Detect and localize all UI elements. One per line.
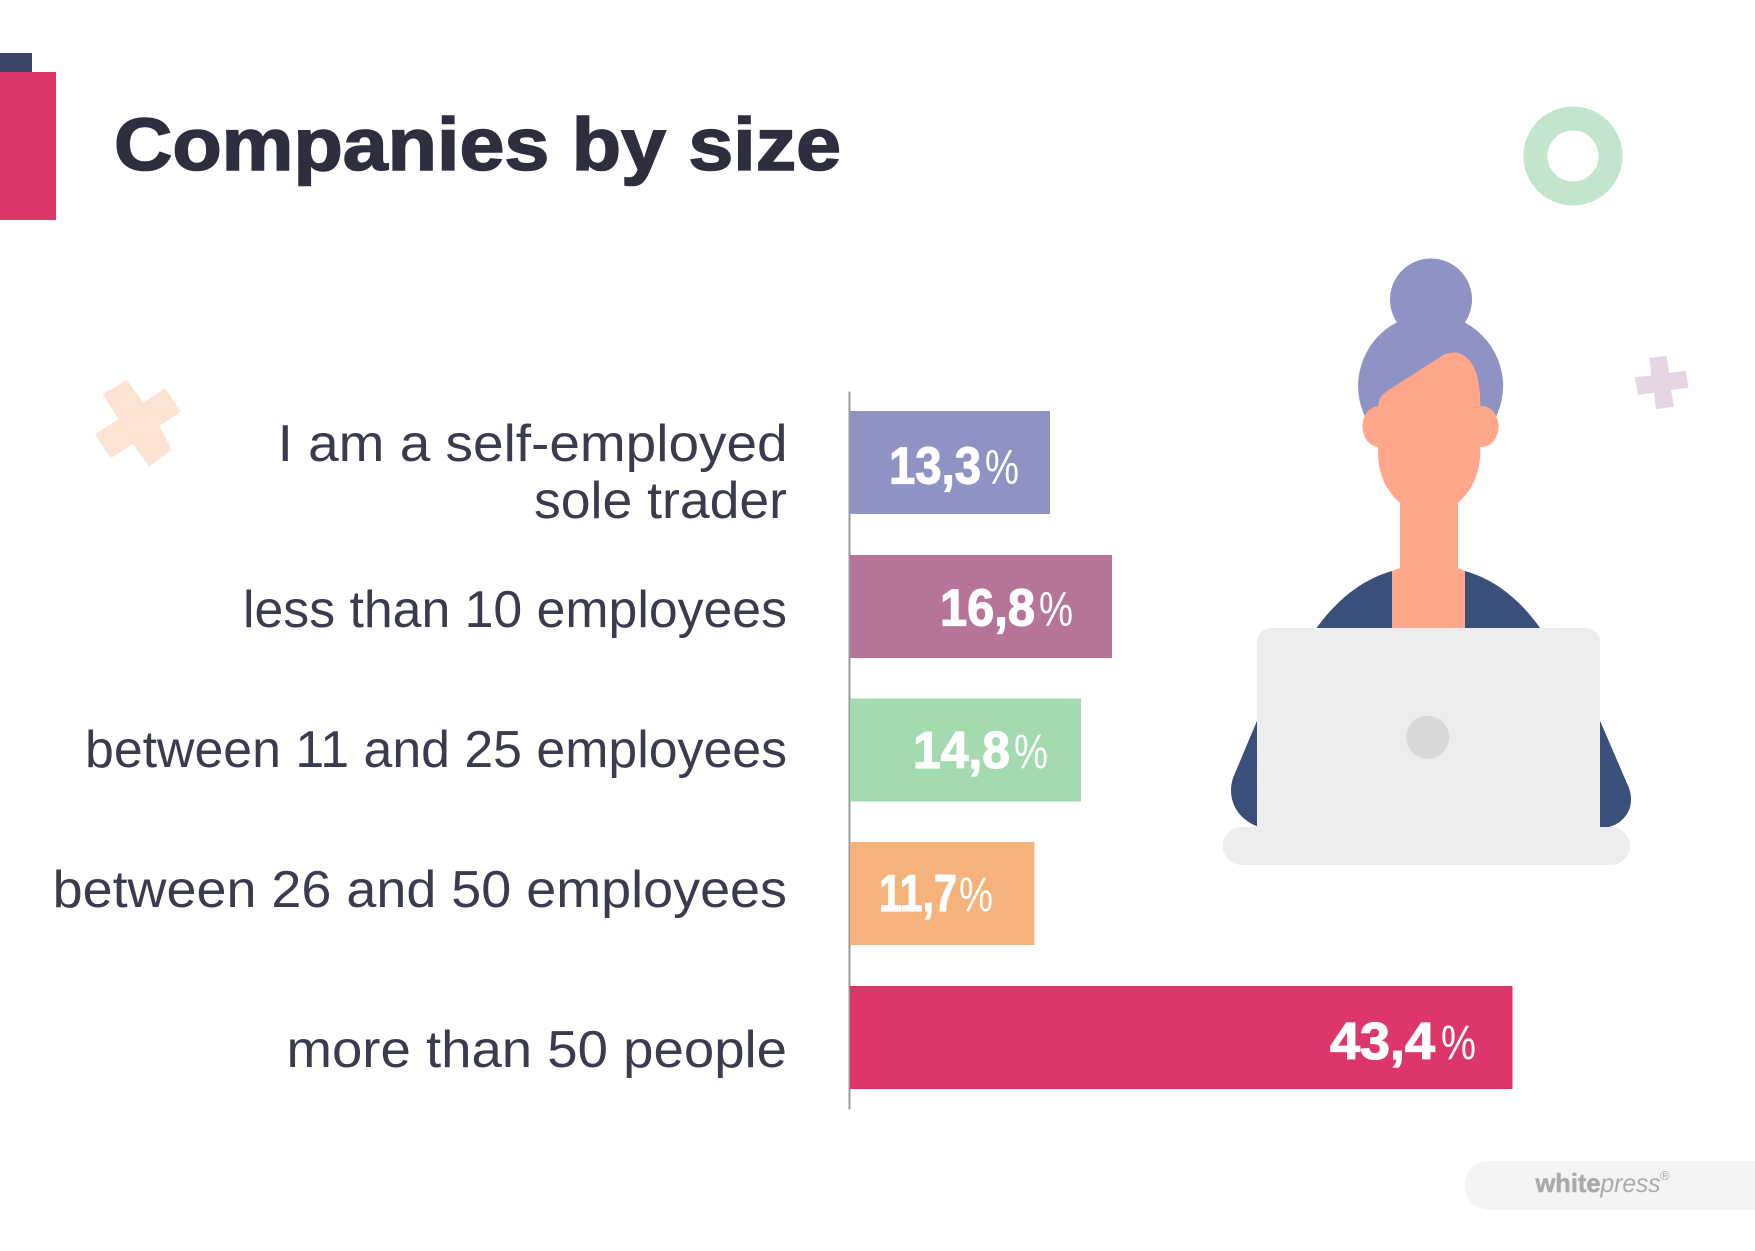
bar: more than 50 43,4%	[850, 986, 1512, 1089]
label: 11 to 25: between 11 and 25 employees	[85, 721, 787, 779]
bar: self-employed 13,3%	[850, 411, 1050, 514]
bar: less than 10 16,8%: %	[1039, 584, 1073, 636]
bar: less than 10 16,8%	[850, 555, 1112, 658]
bar: less than 10 16,8%: 16,8	[940, 580, 1035, 638]
icon: pink plus	[1635, 356, 1688, 409]
label: 26 to 50: between 26 and 50 employees	[53, 861, 787, 919]
icon: green ring	[1536, 118, 1610, 194]
ears	[1362, 406, 1498, 447]
face and neck	[1378, 353, 1480, 630]
bar: 26 to 50 11,7%: %	[959, 869, 993, 922]
bar: more than 50 43,4%: %	[1441, 1017, 1476, 1070]
bar: self-employed 13,3%: 13,3	[889, 438, 981, 496]
bar: more than 50 43,4%: 43,4	[1330, 1013, 1435, 1071]
bar: 11 to 25 14,8%	[850, 698, 1081, 802]
footer logo	[1464, 1161, 1755, 1210]
wordmark	[1535, 1168, 1670, 1198]
title: Companies by size	[114, 103, 841, 186]
wordmark: white	[1535, 1168, 1600, 1198]
wordmark: ®	[1660, 1168, 1670, 1183]
label: less than 10: less than 10 employees	[243, 581, 787, 639]
laptop logo	[1406, 716, 1449, 759]
category labels	[53, 415, 788, 1079]
hair bun	[1390, 258, 1472, 340]
illustration: woman at laptop	[1223, 258, 1631, 865]
bar: 26 to 50 11,7%	[850, 842, 1034, 945]
header accent blocks	[0, 53, 56, 220]
torso	[1315, 571, 1542, 630]
right arm	[1598, 716, 1631, 827]
bar: 11 to 25 14,8%: 14,8	[913, 722, 1010, 780]
hair	[1358, 314, 1503, 458]
label: self-employed: I am a self-employed	[278, 415, 788, 473]
axis	[848, 392, 850, 1110]
left arm	[1231, 716, 1259, 827]
bar: 26 to 50 11,7%: 11,7	[879, 865, 957, 923]
label: self-employed: sole trader	[534, 472, 787, 530]
label: self-employed	[278, 415, 788, 530]
wordmark: press	[1600, 1168, 1660, 1198]
laptop base	[1223, 827, 1630, 865]
laptop screen	[1257, 628, 1600, 848]
label: more than 50: more than 50 people	[286, 1021, 787, 1079]
bar: 11 to 25 14,8%: %	[1014, 726, 1048, 779]
icon: peach cross	[95, 380, 181, 467]
bar chart	[848, 392, 1512, 1110]
bar: self-employed 13,3%: %	[985, 442, 1019, 494]
logo pill	[1464, 1161, 1755, 1210]
